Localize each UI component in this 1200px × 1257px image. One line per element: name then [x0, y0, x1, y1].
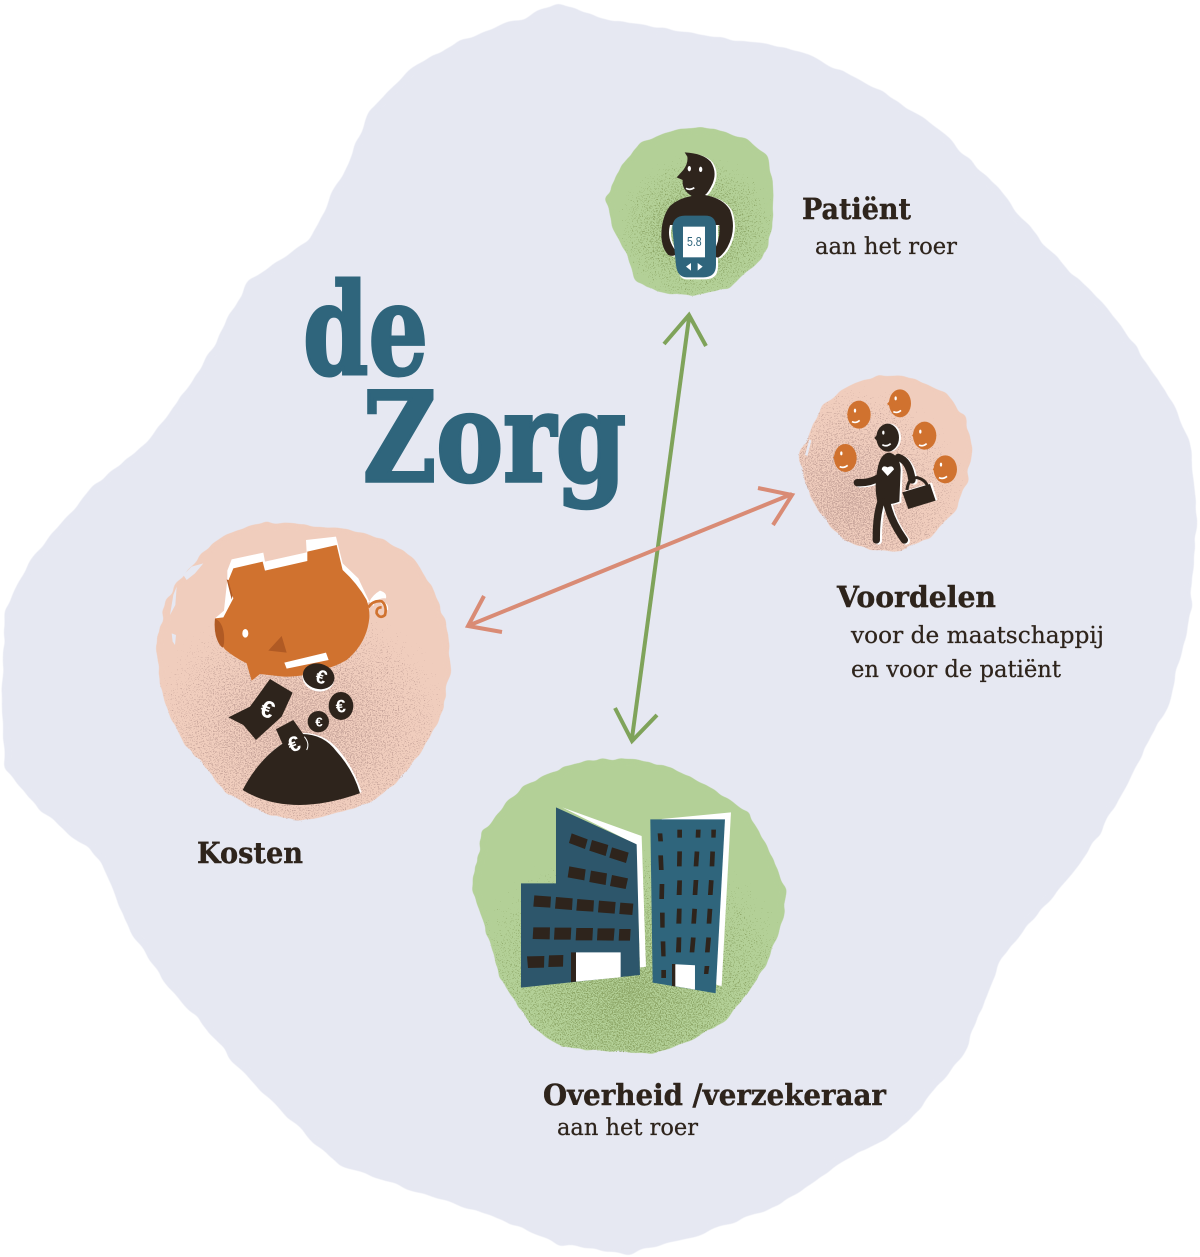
coins and banknotes: € — [256, 695, 278, 725]
text: aan het roer: aan het roer — [815, 234, 957, 260]
handbag — [902, 478, 937, 509]
coins and banknotes: € — [284, 731, 304, 758]
piggy bank — [215, 537, 388, 681]
arrow: green double-headed, Patiënt to Overheid — [615, 315, 706, 741]
orange heads — [833, 389, 957, 483]
text: voor de maatschappij en voor de patiënt: voor de maatschappij — [850, 623, 1104, 649]
text: voor de maatschappij en voor de patiënt: en voor de patiënt — [851, 657, 1062, 683]
title: de Zorg — [303, 256, 626, 511]
icon: office buildings — [472, 758, 786, 1054]
coins and banknotes: € — [315, 714, 323, 729]
icon: piggy bank with euros — [156, 522, 452, 822]
label: Overheid /verzekeraar: Overheid /verzekeraar — [543, 1078, 887, 1112]
title: de Zorg: de — [303, 256, 428, 404]
panel: Kosten — [140, 523, 460, 870]
panel: Voordelen — [798, 375, 1102, 682]
arrow: pink double-headed, Kosten to Voordelen — [468, 488, 792, 632]
label: Voordelen: Voordelen — [836, 580, 996, 614]
title: de Zorg: Zorg — [363, 366, 626, 511]
left building — [521, 807, 646, 988]
panel: Patiënt — [606, 128, 957, 308]
coins and banknotes: € — [335, 696, 347, 717]
coins and banknotes — [228, 660, 362, 805]
coins and banknotes: € — [312, 666, 330, 690]
text: voor de maatschappij en voor de patiënt — [850, 623, 1104, 683]
icon: patient with glucose meter — [606, 128, 780, 308]
icon: person with bag and smiling heads — [798, 375, 972, 552]
panel: Overheid / verzekeraar — [458, 758, 887, 1141]
text: aan het roer: aan het roer — [557, 1115, 698, 1141]
label: Kosten: Kosten — [197, 836, 303, 870]
label: Patiënt: Patiënt — [802, 192, 912, 226]
right building — [650, 812, 731, 993]
icon: patient with glucose meter: 5.8 — [687, 234, 702, 249]
